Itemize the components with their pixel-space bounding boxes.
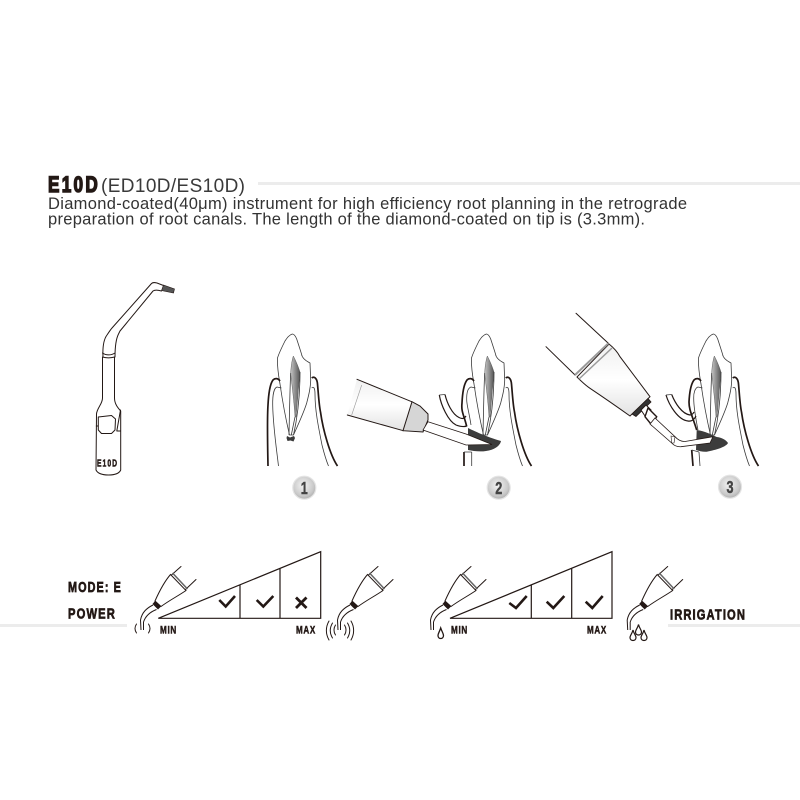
max label: MAX [296,624,316,636]
open flap [666,394,696,421]
title [48,172,245,197]
step 3: tooth with handpiece at retrograde position [546,313,758,466]
mode label: MODE: E [68,579,122,596]
handpiece [546,313,713,447]
icon: handpiece high irrigation [627,566,683,640]
title: E10D [48,172,100,197]
max label: MAX [587,624,607,636]
check mark [547,596,564,608]
step 2: tooth with ultrasonic handpiece [347,334,532,466]
lesion at root apex [286,436,295,442]
step 1: tooth with periapical lesion [267,334,338,466]
title rule [258,182,800,185]
min label: MIN [160,624,177,636]
step badge 3: 3 [726,477,734,497]
irrigation scale chart [450,552,612,636]
right footer rule [668,624,800,627]
icon: handpiece high vibration [326,566,393,640]
description text [48,195,687,228]
open flap [439,394,467,427]
step badge 3 [718,475,742,498]
check mark [586,596,603,608]
description text: preparation of root canals. The length of the diamond-coated on tip is (3.3mm). [48,210,645,228]
handpiece [347,379,492,445]
icon: handpiece low vibration [135,566,196,633]
cross mark [296,598,306,608]
check mark [219,596,235,606]
instrument: E10D tip [96,282,174,475]
power scale chart [158,552,321,636]
instrument: E10D tip: E10D [97,458,118,470]
step badge 2: 2 [495,478,502,498]
title: (ED10D/ES10D) [101,176,245,197]
irrigation label: IRRIGATION [670,606,746,624]
check mark [509,596,527,608]
resected bone cavity [696,430,728,452]
resected bone cavity [468,428,501,451]
power label: POWER [68,606,116,622]
check mark [257,596,273,606]
min label: MIN [451,624,468,636]
step badge 1 [293,476,316,499]
step badge 2 [487,476,510,499]
icon: handpiece low irrigation [430,566,486,638]
left footer rule [0,624,127,627]
step badge 1: 1 [301,478,308,498]
description text: Diamond-coated(40μm) instrument for high efficiency root planning in the retrograde [48,195,687,213]
